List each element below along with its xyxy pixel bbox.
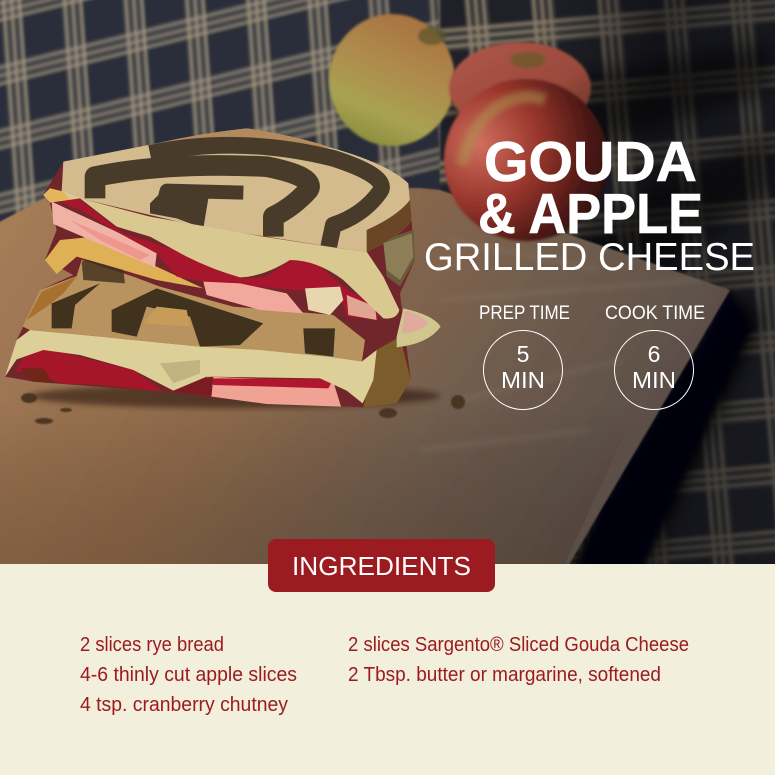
cutting board — [0, 188, 730, 580]
bottom cranberry — [16, 348, 163, 392]
crumbs — [21, 393, 465, 424]
apple slice mid — [203, 282, 303, 313]
apple: front — [444, 79, 608, 241]
title line: and apple: & APPLE — [478, 182, 703, 246]
prep time label: PREP TIME — [479, 303, 570, 324]
bottom cheese — [5, 330, 377, 403]
lower bread — [23, 260, 365, 363]
prep time badge — [484, 330, 562, 410]
ingredients list: right column: 2 Tbsp. butter or margarine, softened — [348, 664, 661, 686]
apple slice top — [52, 202, 157, 267]
ingredients list: left column: 4 tsp. cranberry chutney — [80, 694, 288, 716]
ingredients list: left column: 4-6 thinly cut apple slices — [80, 664, 297, 686]
ingredients list: right column — [348, 634, 689, 686]
bottom apple — [207, 377, 341, 407]
sandwich — [5, 128, 441, 407]
sandwich shadow — [30, 384, 440, 408]
cook time — [605, 303, 705, 410]
cook time label: COOK TIME — [605, 303, 705, 324]
ingredients heading: INGREDIENTS — [292, 551, 471, 581]
ingredients heading — [268, 539, 495, 592]
ingredients list: left column: 2 slices rye bread — [80, 634, 224, 656]
cook time badge — [614, 330, 694, 410]
cook time badge: 6 — [648, 341, 660, 367]
cranberry mid — [57, 198, 382, 320]
apple: left — [329, 14, 455, 146]
plaid cloth — [0, 0, 775, 574]
cream ingredients background — [0, 564, 775, 775]
title — [424, 130, 755, 279]
title line: gouda: GOUDA — [484, 130, 697, 194]
top cheese — [43, 188, 399, 319]
ingredients list: left column — [80, 634, 297, 716]
sandwich base silhouette — [5, 160, 415, 408]
prep time badge: 5 — [517, 341, 529, 367]
ingredients list: right column: 2 slices Sargento® Sliced Gouda Cheese — [348, 634, 689, 656]
back cheese and apple — [363, 337, 411, 407]
prep time — [479, 303, 570, 410]
board shadow — [560, 295, 760, 574]
bread swirl — [95, 145, 381, 248]
apple: back — [448, 40, 592, 114]
apple slice right — [397, 308, 441, 347]
lower bread swirl — [52, 260, 335, 357]
prep time badge: MIN — [501, 367, 545, 393]
yellow cheese mid — [45, 237, 203, 288]
cook time badge: MIN — [632, 367, 676, 393]
apples — [329, 14, 608, 241]
food photograph — [0, 0, 775, 580]
title line: grilled cheese: GRILLED CHEESE — [424, 236, 755, 279]
top bread — [62, 128, 412, 252]
